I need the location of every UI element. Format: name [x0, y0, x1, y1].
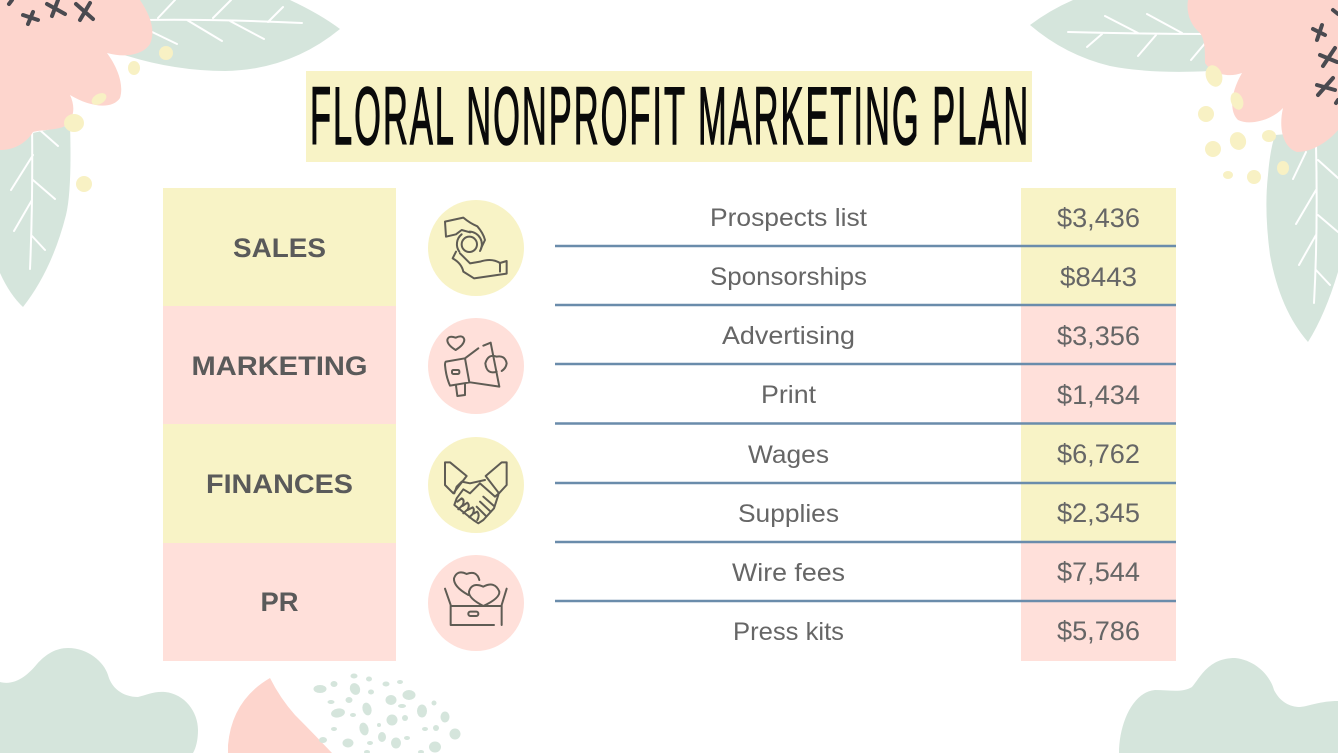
table rows: values: $6,762 [1057, 439, 1140, 469]
bottom green speckles [314, 674, 460, 753]
table rows: values [1057, 203, 1140, 646]
icon: hands holding coin [428, 200, 524, 296]
table rows: items: Advertising [722, 322, 855, 350]
top-right leaf: horizontal [1030, 0, 1213, 72]
table rows: items: Sponsorships [710, 263, 867, 291]
category: finances: FINANCES [206, 469, 353, 499]
value cell backgrounds [1021, 188, 1176, 661]
top-right pink flower [1188, 0, 1338, 152]
table rows: values: $3,356 [1057, 321, 1140, 351]
icon: box with hearts [428, 555, 524, 651]
table rows: values: $2,345 [1057, 498, 1140, 528]
top-left pink flower [0, 0, 152, 150]
top-left leaf: vertical [0, 123, 70, 307]
category: marketing [163, 306, 396, 424]
top-left leaf: horizontal [115, 0, 340, 71]
table rows: values: $1,434 [1057, 380, 1140, 410]
top-right yellow dots [1198, 63, 1289, 184]
table rows: items: Wire fees [732, 559, 845, 587]
category: finances [163, 424, 396, 543]
table rows: values: $5,786 [1057, 616, 1140, 646]
top-left yellow dots [64, 46, 173, 192]
table rows: items: Prospects list [710, 204, 867, 232]
table rows: items: Press kits [733, 618, 844, 646]
category: sales [163, 188, 396, 306]
bottom-right green blob [1119, 658, 1338, 753]
category: marketing: MARKETING [192, 351, 368, 381]
table rows: items: Supplies [738, 500, 839, 528]
icon: megaphone with hearts [428, 318, 524, 414]
table rows: items [710, 204, 867, 646]
top-right leaf: vertical [1266, 130, 1338, 342]
table rows: values: $7,544 [1057, 557, 1140, 587]
bottom pink petal [228, 678, 332, 753]
bottom-left green blob [0, 648, 198, 753]
table rows: values: $8443 [1060, 262, 1137, 292]
category: pr [163, 543, 396, 661]
category: pr: PR [260, 587, 298, 617]
table rows: values: $3,436 [1057, 203, 1140, 233]
category: sales: SALES [233, 233, 326, 263]
table rows: items: Print [761, 381, 816, 409]
title: FLORAL NONPROFIT MARKETING PLAN [310, 71, 1028, 162]
table rows: items: Wages [748, 441, 829, 469]
icon: handshake [428, 437, 524, 533]
